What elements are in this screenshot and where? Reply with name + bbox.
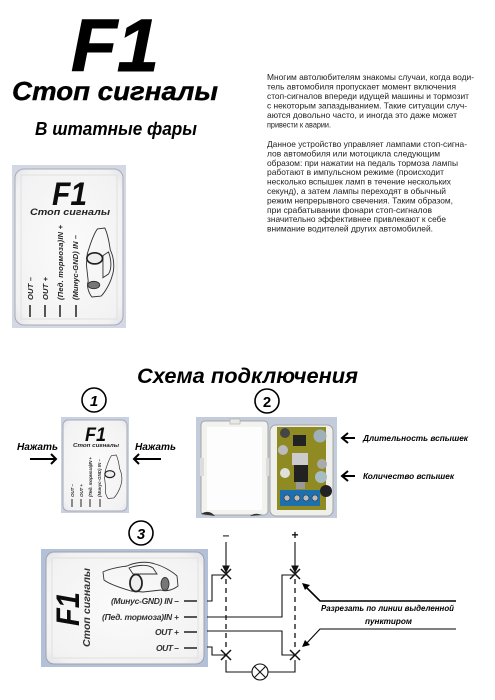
step 2 photo: opened device (196, 417, 337, 518)
callout: cut along dashed line: Разрезать по линии выделенной (321, 603, 455, 613)
description text: режим непрерывного свечения. Таким образом, (267, 195, 453, 205)
description text: Многим автолюбителям знакомы случаи, когда води- (267, 72, 474, 82)
device photo: top view of F1 box: F1 (52, 176, 87, 212)
device photo: top view of F1 box: OUT + (41, 276, 50, 300)
step 3 device photo: F1 (50, 592, 86, 626)
title: F1: F1 (71, 4, 159, 87)
device photo: top view of F1 box: OUT – (26, 277, 35, 300)
description text: тель автомобиля пропускает момент включения (267, 82, 456, 92)
step 3 device photo: Стоп сигналы (81, 568, 93, 647)
polarity label: plus: + (291, 528, 299, 542)
arrow and label: Длительность вспышек: Длительность вспышек (362, 434, 469, 443)
step 3 badge: 3 (137, 526, 146, 543)
device photo: top view of F1 box (12, 165, 126, 328)
description text: стоп-сигналов впереди идущей машины и тормозит (267, 91, 469, 101)
step 1 device photo: (Пед. тормоза)IN + (88, 457, 93, 497)
description text: аются довольно часто, и иногда это даже может (267, 110, 457, 120)
label and arrow: Нажать left: Нажать (17, 441, 58, 453)
step 1 device photo: F1 (85, 425, 106, 446)
description text: внимание водителей других автомобилей. (267, 224, 433, 234)
step 3 device photo: OUT – (156, 643, 179, 653)
step 3 device photo: (Минус-GND) IN – (111, 596, 179, 606)
polarity label: minus: – (223, 528, 230, 542)
step 1 device photo (61, 417, 129, 513)
description text: лов автомобиля или мотоцикла следующим (267, 148, 440, 158)
step 1 badge (82, 388, 106, 412)
subtitle: Стоп сигналы: Стоп сигналы (12, 76, 218, 106)
lamp symbol (252, 664, 268, 680)
step 1 device photo: OUT – (70, 484, 75, 497)
description text: значительно эффективнее привлекают к себе (267, 214, 446, 224)
callout: cut along dashed line (302, 583, 456, 647)
step 1 badge: 1 (90, 393, 98, 410)
device photo: top view of F1 box: Стоп сигналы (30, 207, 110, 218)
step 1 device photo: OUT + (79, 484, 84, 497)
step 1 device photo: (Минус-GND) IN – (97, 459, 102, 497)
description text: работают в импульсном режиме (происходит (267, 167, 444, 177)
step 3 device photo: OUT + (155, 627, 179, 637)
subtitle: В штатные фары: В штатные фары (35, 119, 198, 139)
description text: привести к аварии. (267, 120, 331, 130)
device photo: top view of F1 box: (Пед. тормоза)IN + (56, 224, 65, 300)
wiring diagram (207, 528, 300, 680)
description text: Данное устройство управляет лампами стоп-сигна- (267, 139, 467, 149)
step 2 badge (255, 389, 279, 413)
step 3 device photo: (Пед. тормоза)IN + (102, 612, 179, 622)
label and arrow: Нажать right: Нажать (135, 441, 176, 453)
callout: cut along dashed line: пунктиром (365, 616, 413, 626)
description text: несколько вспышек ламп в течение нескольких (267, 177, 452, 187)
step 3 badge (129, 521, 153, 545)
description text (267, 72, 474, 234)
arrow and label: Количество вспышек: Количество вспышек (363, 472, 455, 481)
label and arrow: Нажать left (17, 441, 58, 464)
step 2 badge: 2 (263, 394, 271, 411)
device photo: top view of F1 box: (Минус-GND) IN – (71, 235, 80, 300)
label and arrow: Нажать right (134, 441, 176, 464)
description text: образом: при нажатии на педаль тормоза лампы (267, 158, 458, 168)
description text: при срабатывании фонари стоп-сигналов (267, 205, 433, 215)
description text: с некоторым запаздыванием. Такие ситуации случ- (267, 100, 467, 110)
step 3 device photo (41, 549, 208, 667)
description text: секунд), а затем лампы переходят в обычный (267, 186, 446, 196)
heading: Схема подключения: Схема подключения (137, 365, 358, 388)
step 1 device photo: Стоп сигналы (73, 443, 119, 449)
